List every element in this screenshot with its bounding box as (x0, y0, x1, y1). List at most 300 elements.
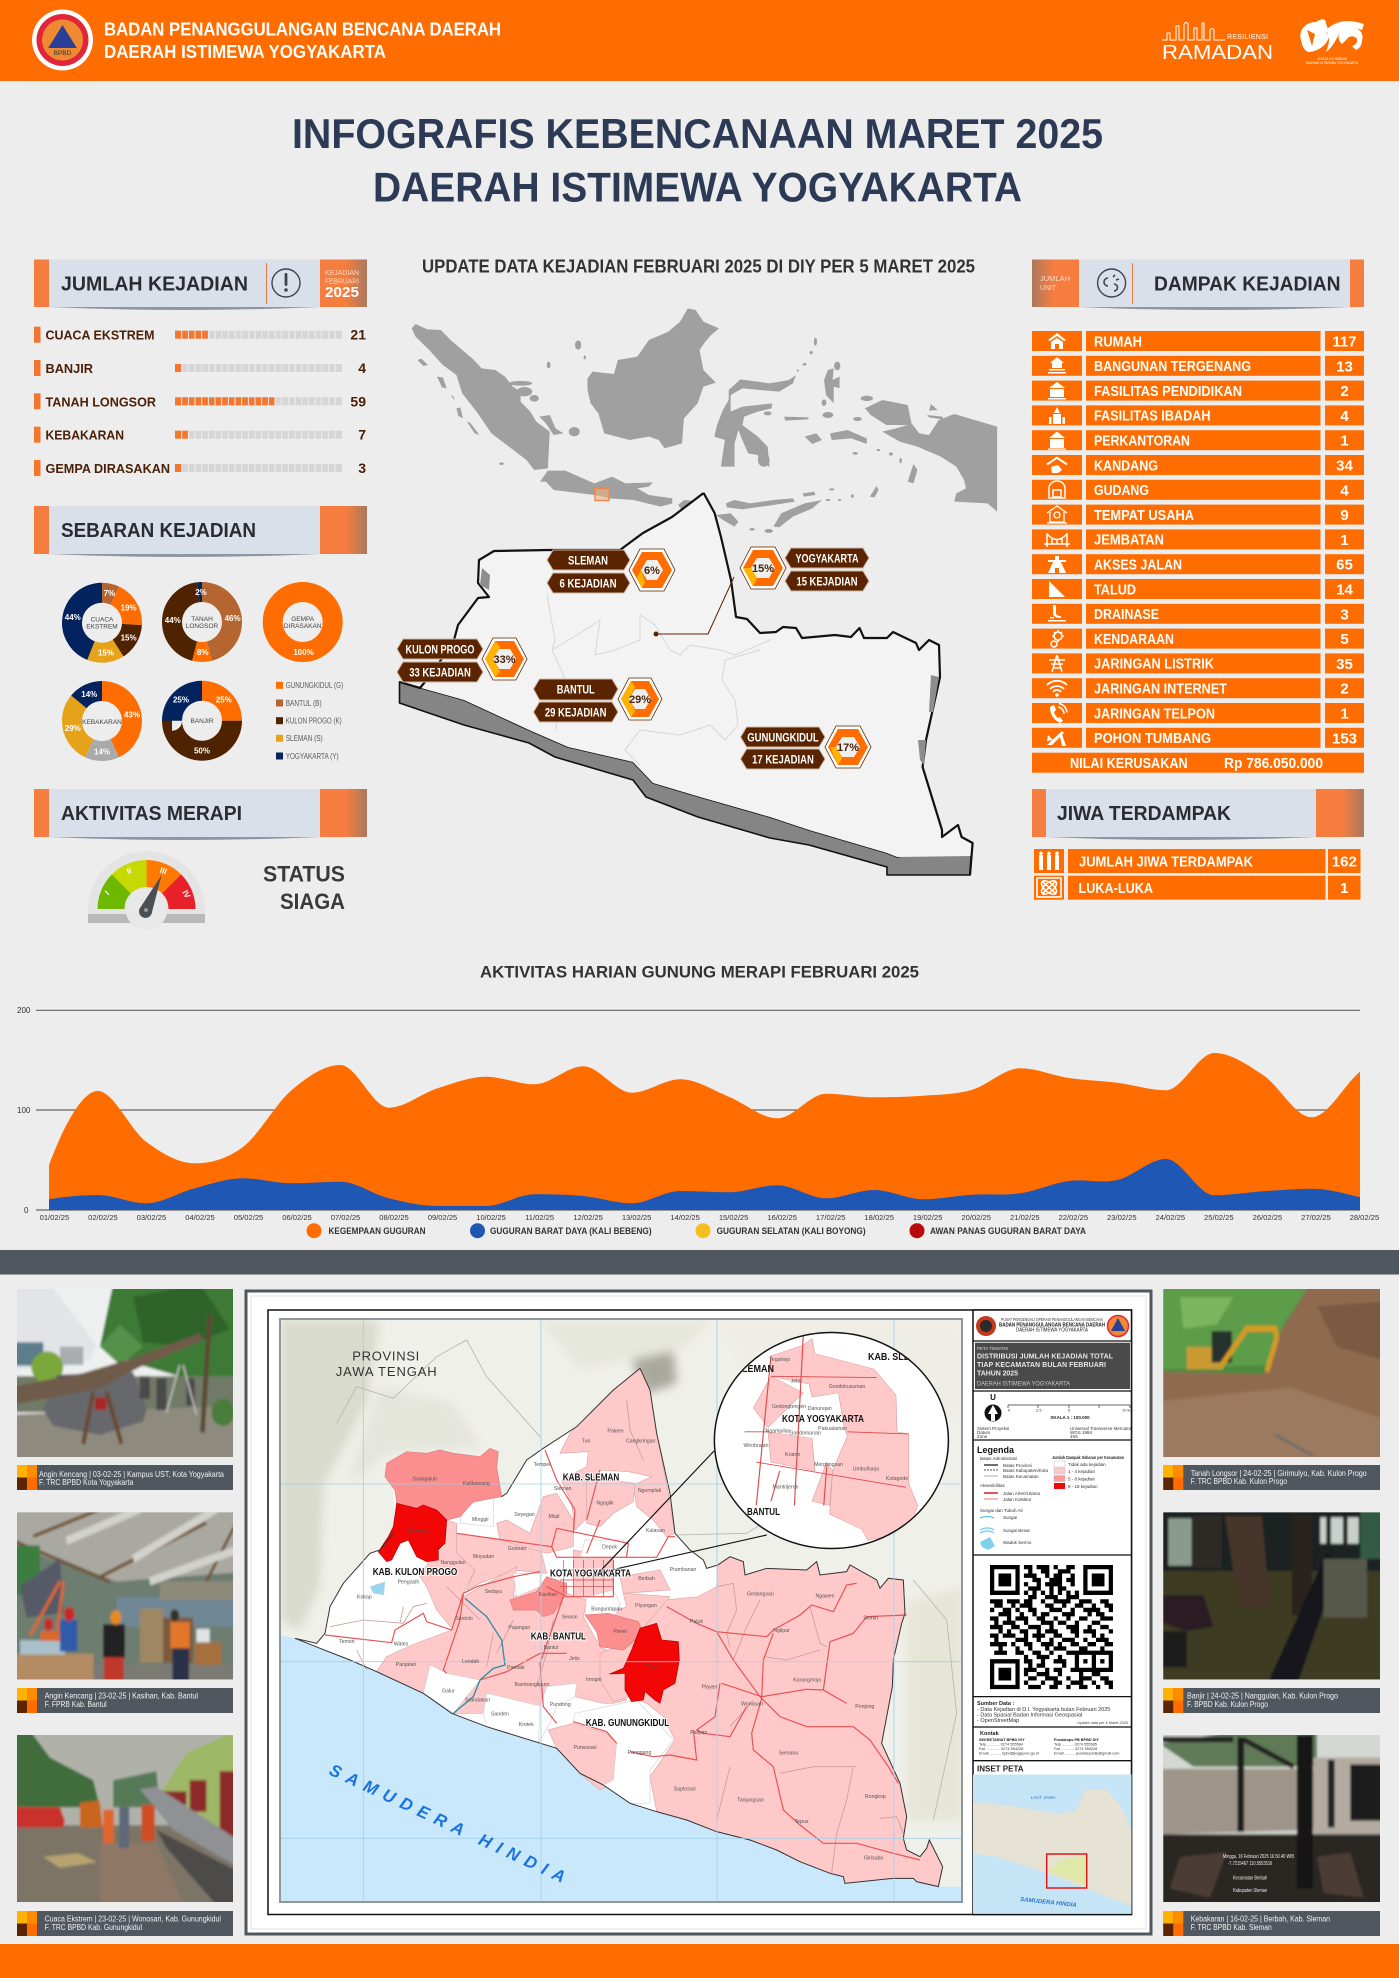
donut: cuaca ekstrem: 44% (65, 613, 81, 622)
bar row: tanah longsor (34, 393, 366, 409)
map labels: kecamatan: Depok (602, 1545, 618, 1551)
sidebar legend: Tidak ada kejadian (1068, 1462, 1106, 1467)
x axis date labels: 24/02/25 (1156, 1213, 1185, 1222)
sidebar map title: DAERAH ISTIMEWA YOGYAKARTA (977, 1380, 1071, 1388)
divider band (0, 1250, 1399, 1274)
sidebar map title (975, 1343, 1130, 1389)
map labels: kecamatan: Saptosari (674, 1786, 696, 1792)
caption: photo kampus UST: F. TRC BPBD Kota Yogyakarta (39, 1478, 134, 1487)
panel heading: dampak kejadian: DAMPAK KEJADIAN (1154, 272, 1340, 296)
title (292, 110, 1103, 210)
title: DAERAH ISTIMEWA YOGYAKARTA (373, 164, 1022, 210)
table row: jembatan: JEMBATAN (1094, 533, 1164, 549)
bar row: gempa dirasakan: GEMPA DIRASAKAN (46, 461, 170, 476)
table row: gudang: 4 (1340, 482, 1349, 499)
contact: Kontak (980, 1731, 1000, 1737)
map labels: kecamatan: Semin (863, 1615, 878, 1621)
x axis date labels: 21/02/25 (1010, 1213, 1040, 1222)
photo: kebakaran berbah: Kecamatan Berbah (1233, 1875, 1268, 1882)
icon: Resiliensi Ramadan logo: RESILIENSI (1227, 34, 1268, 41)
photo: kebakaran berbah: -7.7215467 110.5553516 (1228, 1860, 1273, 1867)
data source note: Sumber Data : (977, 1701, 1014, 1707)
map labels: kecamatan: Ngawen (815, 1594, 835, 1600)
map labels: kabupaten and province (336, 1349, 669, 1729)
panel heading: dampak kejadian: JUMLAH (1040, 274, 1070, 283)
contact: Pusdalops-PB BPBD DIY (1054, 1738, 1099, 1742)
sidebar legend: Waduk Sermo (1003, 1540, 1032, 1545)
callout: gunungkidul: GUNUNGKIDUL (747, 732, 819, 744)
map labels: kecamatan: Rongkop (865, 1794, 886, 1800)
sidebar legend: Jalan Arteri/Utama (1003, 1491, 1041, 1496)
photo: kebakaran berbah: Kabupaten Sleman (1233, 1888, 1267, 1894)
y axis labels and gridlines: 100 (17, 1106, 31, 1115)
contact: Email ........... bpbd@jogjaprov.go.id (979, 1752, 1039, 1756)
bar row: banjir: 4 (358, 360, 366, 376)
QR code (990, 1565, 1113, 1689)
panel heading: aktivitas merapi: AKTIVITAS MERAPI (61, 802, 242, 825)
callout: bantul (534, 678, 662, 722)
donut: gempa dirasakan (273, 592, 333, 657)
x axis date labels: 20/02/25 (961, 1213, 991, 1222)
icon: Resiliensi Ramadan logo (1162, 22, 1273, 64)
inset labels: Umbulharjo (853, 1467, 879, 1473)
table row: nilai kerusakan: NILAI KERUSAKAN (1070, 756, 1188, 772)
x axis date labels: 05/02/25 (234, 1213, 263, 1222)
map labels: kecamatan: Girisubo (864, 1856, 883, 1862)
sidebar legend: Batas Provinsi (1003, 1463, 1032, 1468)
table row: jaringan internet: JARINGAN INTERNET (1094, 682, 1227, 698)
callout: sleman: SLEMAN (568, 556, 608, 568)
data source note: - OpenStreetMap (977, 1718, 1019, 1724)
donut: kebakaran: KEBAKARAN (82, 719, 122, 726)
table row: pohon tumbang: 153 (1332, 730, 1357, 747)
inset labels: Pakualaman (818, 1426, 847, 1432)
map labels: kecamatan: Nanggulan (440, 1560, 466, 1566)
donut: cuaca ekstrem: 15% (121, 634, 137, 642)
table row: jumlah jiwa terdampak: JUMLAH JIWA TERDAMPAK (1079, 854, 1253, 870)
map: indonesia (412, 308, 997, 533)
map labels: kecamatan: Sewon (562, 1615, 578, 1621)
caption: photo kasihan: F. FPRB Kab. Bantul (45, 1700, 107, 1709)
table row: rumah (1032, 331, 1364, 351)
table row: jaringan internet: 2 (1340, 681, 1349, 698)
map labels: kecamatan: Sentolo (455, 1616, 473, 1622)
caption: photo nanggulan (1163, 1688, 1380, 1713)
panel heading: jumlah kejadian: KEJADIAN (325, 268, 359, 277)
table row: jaringan telpon: JARINGAN TELPON (1094, 706, 1215, 722)
chart legend: KEGEMPAAN GUGURAN (328, 1226, 426, 1237)
leader line: Yogyakarta (656, 577, 734, 634)
map labels: kecamatan: Playen (701, 1684, 717, 1690)
red kecamatan (378, 1503, 679, 1703)
table row: rumah: 117 (1332, 334, 1357, 350)
y axis labels and gridlines: 0 (24, 1206, 29, 1215)
chart legend: AWAN PANAS GUGURAN BARAT DAYA (930, 1226, 1086, 1237)
map labels: kabupaten and province: KAB. GUNUNGKIDUL (586, 1718, 669, 1729)
contact: SEKRETARIAT BPBD DIY (979, 1738, 1025, 1742)
table row: kandang: KANDANG (1094, 458, 1158, 474)
inset labels: Mantrijeron (773, 1484, 799, 1490)
photo: tanah longsor girimulyo (1163, 1289, 1380, 1457)
donut: cuaca ekstrem: 15% (98, 648, 114, 658)
caption: photo wonosari: Cuaca Ekstrem | 23-02-25 | Wonosari, Kab. Gunungkidul (45, 1915, 221, 1924)
map sidebar (973, 1310, 1134, 1914)
map labels: kecamatan: Srandakan (465, 1697, 490, 1703)
table row: jaringan listrik: JARINGAN LISTRIK (1094, 657, 1214, 673)
sidebar header with logos: DAERAH ISTIMEWA YOGYAKARTA (1016, 1328, 1089, 1334)
map labels: kecamatan: Nglipar (773, 1628, 790, 1634)
status text: SIAGA (280, 889, 345, 914)
map labels: kecamatan: Girimulyo (408, 1529, 430, 1535)
callout: kulon progo: KULON PROGO (406, 644, 475, 656)
north arrow and scale: SKALA 1 : 100.000 (1050, 1415, 1090, 1420)
contact (979, 1731, 1119, 1756)
sidebar legend: Batas Kabupaten/Kota (1003, 1468, 1049, 1473)
map labels: kecamatan: Dlingo (645, 1664, 659, 1670)
table row: kandang (1032, 455, 1364, 475)
light pink kecamatan (377, 1368, 943, 1887)
callout: gunungkidul (741, 726, 871, 769)
map labels: kecamatan: Sanden (491, 1712, 509, 1718)
table row: nilai kerusakan: Rp 786.050.000 (1224, 756, 1323, 772)
map labels: kecamatan: Kasihan (539, 1592, 557, 1598)
bar row: banjir (34, 360, 366, 376)
donut: cuaca ekstrem (65, 589, 137, 658)
panel: aktivitas merapi (34, 789, 367, 930)
callout: kulon progo: 33 KEJADIAN (409, 668, 471, 680)
gauge: status merapi: III (159, 866, 168, 876)
map labels: kecamatan: Cangkringan (626, 1438, 656, 1444)
map labels: kecamatan: Pengasih (398, 1579, 419, 1585)
table row: pohon tumbang (1032, 728, 1364, 748)
icon: warehouse (1049, 481, 1065, 498)
donut: cuaca ekstrem: 19% (121, 604, 137, 612)
chart legend (306, 1223, 1086, 1238)
photo: angin kencang kasihan (17, 1512, 233, 1680)
map labels: kecamatan: Berbah (638, 1576, 655, 1582)
panel heading: dampak kejadian: UNIT (1040, 283, 1056, 292)
callout: bantul: 29% (629, 694, 651, 706)
panel heading: sebaran kejadian (34, 506, 367, 557)
icon: mosque (1049, 407, 1065, 424)
white kecamatan (423, 1497, 673, 1803)
photo: pohon tumbang kampus UST (17, 1289, 233, 1457)
caption: photo kasihan: Angin Kencang | 23-02-25 | Kasihan, Kab. Bantul (45, 1692, 198, 1700)
table row: tempat usaha: TEMPAT USAHA (1094, 508, 1194, 524)
inset labels: KOTA YOGYAKARTA (782, 1414, 864, 1425)
x axis date labels: 28/02/25 (1350, 1213, 1379, 1222)
map labels: kecamatan: Bambanglipuro (515, 1682, 550, 1688)
inset labels: Gondokusuman (829, 1384, 865, 1390)
map labels: kecamatan: Karangmojo (793, 1677, 821, 1683)
contact: Email .......... pusdalopsdiy@gmail.com (1054, 1752, 1119, 1756)
table row: pohon tumbang: POHON TUMBANG (1094, 731, 1211, 747)
contact: Fax ............. 0274 554228 (979, 1747, 1023, 1751)
inset labels: Kraton (785, 1452, 800, 1458)
header organisation name: BADAN PENANGGULANGAN BENCANA DAERAH (104, 20, 501, 40)
north arrow and scale: 2,5 (1036, 1408, 1042, 1412)
map labels: kecamatan: Wonosari (741, 1702, 763, 1708)
chart legend: GUGURAN BARAT DAYA (KALI BEBENG) (490, 1226, 652, 1237)
status text (263, 862, 345, 914)
x axis date labels (40, 1213, 1379, 1222)
map labels: kecamatan: Pajangan (508, 1625, 530, 1631)
caption: photo girimulyo: Tanah Longsor | 24-02-25 | Girimulyo, Kab. Kulon Progo (1191, 1469, 1367, 1478)
panel heading: sebaran kejadian: SEBARAN KEJADIAN (61, 519, 256, 542)
map labels: kecamatan: Turi (582, 1438, 590, 1444)
sidebar legend: Sungai (1003, 1515, 1017, 1520)
panel heading: dampak kejadian (1032, 260, 1364, 310)
panel heading: jumlah kejadian: FEBRUARI (325, 276, 359, 286)
inset labels: Mergangsan (814, 1462, 843, 1468)
north arrow and scale: Datum (977, 1430, 991, 1435)
map labels: kecamatan: Gedangsari (747, 1592, 774, 1598)
map labels: kecamatan: Wates (394, 1641, 409, 1647)
x axis date labels: 04/02/25 (185, 1213, 215, 1222)
table row: rumah: RUMAH (1094, 334, 1142, 350)
icon: phone signal (1050, 704, 1067, 723)
sidebar map title: TIAP KECAMATAN BULAN FEBRUARI (977, 1362, 1106, 1369)
map labels: kecamatan: Pundong (550, 1702, 571, 1708)
map labels: kecamatan: Ngemplak (638, 1488, 662, 1494)
inset labels (742, 1353, 908, 1515)
legend: kabupaten: BANTUL (B) (286, 699, 322, 708)
sidebar map title: TAHUN 2025 (977, 1370, 1018, 1378)
inset labels: KAB. SLEMAN (868, 1352, 930, 1363)
icon: BPBD logo (32, 10, 93, 70)
chart legend: GUGURAN SELATAN (KALI BOYONG) (717, 1226, 866, 1237)
map labels: kecamatan: Tanjungsari (737, 1798, 764, 1804)
donut: kebakaran: 29% (65, 724, 81, 733)
north arrow and scale: Zone (977, 1434, 988, 1439)
x axis date labels: 11/02/25 (525, 1213, 554, 1222)
table row: tempat usaha (1032, 505, 1364, 525)
callout: yogyakarta: 15 KEJADIAN (796, 576, 858, 588)
icon: people (1039, 852, 1059, 870)
legend: kabupaten: SLEMAN (S) (286, 734, 323, 743)
table row: kendaraan (1032, 629, 1364, 649)
donut: tanah longsor (165, 588, 241, 657)
panel heading: jiwa terdampak: JIWA TERDAMPAK (1057, 802, 1231, 825)
caption: photo kampus UST: Angin Kencang | 03-02-25 | Kampus UST, Kota Yogyakarta (39, 1470, 224, 1479)
header organisation name (104, 20, 501, 62)
table row: nilai kerusakan (1032, 753, 1364, 773)
caption: photo berbah (1163, 1911, 1380, 1936)
north arrow and scale: 49S (1070, 1434, 1078, 1439)
caption: photo nanggulan: Banjir | 24-02-25 | Nanggulan, Kab. Kulon Progo (1187, 1692, 1338, 1700)
panel heading: jumlah kejadian (34, 260, 367, 310)
footer bar (0, 1944, 1399, 1978)
sidebar legend: Sungai Besar (1003, 1528, 1031, 1533)
table row: luka-luka: LUKA-LUKA (1078, 881, 1153, 897)
donut: kebakaran: 14% (94, 748, 110, 756)
icon: Resiliensi Ramadan logo: RAMADAN (1162, 41, 1273, 64)
sidebar legend: Jumlah Dampak Sebaran per Kecamatan (1052, 1455, 1124, 1460)
icon: house (1048, 333, 1066, 349)
table row: jaringan telpon: 1 (1340, 706, 1349, 722)
panel heading: jiwa terdampak (1032, 789, 1364, 840)
map label: samudera hindia: SAMUDERA HINDIA (326, 1760, 568, 1887)
contact: Fax ............ 0274 554228 (1054, 1747, 1097, 1751)
title: INFOGRAFIS KEBENCANAAN MARET 2025 (292, 110, 1103, 157)
x axis date labels: 09/02/25 (428, 1213, 457, 1222)
table row: kandang: 34 (1336, 458, 1353, 474)
inset labels: BANTUL (747, 1507, 780, 1518)
data source note (977, 1701, 1128, 1725)
status text: STATUS (263, 862, 345, 886)
sidebar legend: Jalan Kolektor (1003, 1497, 1032, 1502)
donut: tanah longsor: 46% (225, 614, 241, 623)
x axis date labels: 03/02/25 (137, 1213, 166, 1222)
sidebar legend: 9 - 18 kejadian (1068, 1484, 1098, 1489)
donut: tanah longsor: 44% (165, 616, 181, 625)
panel heading: jumlah kejadian: JUMLAH KEJADIAN (61, 272, 248, 296)
table row: jembatan: 1 (1340, 532, 1349, 549)
table row: bangunan tergenang: 13 (1336, 358, 1353, 375)
icon: fallen tree (1047, 731, 1066, 746)
table row: gudang (1032, 480, 1364, 500)
x axis date labels: 26/02/25 (1253, 1213, 1282, 1222)
callout: gunungkidul: 17% (837, 742, 859, 754)
donut: gempa dirasakan: GEMPA (291, 616, 315, 623)
donut: banjir (172, 691, 232, 756)
map labels: kecamatan: Jetis (569, 1656, 580, 1662)
marker: DIY location on Java (595, 488, 609, 500)
map labels: kecamatan: Pleret (613, 1629, 627, 1635)
bar row: cuaca ekstrem: CUACA EKSTREM (46, 328, 154, 342)
map labels: kecamatan: Kalasan (646, 1528, 665, 1534)
inset labels: Gedongtengen (772, 1404, 806, 1410)
table row: gudang: GUDANG (1094, 483, 1149, 499)
data source note: Update data per 5 Maret 2025 (1077, 1721, 1128, 1725)
area: kegempaan guguran (49, 1053, 1360, 1210)
north arrow and scale: 5 (1068, 1408, 1071, 1412)
city grid (560, 1560, 613, 1597)
x axis date labels: 06/02/25 (282, 1213, 312, 1222)
caption: photo kampus UST (17, 1465, 233, 1490)
x axis date labels: 18/02/25 (864, 1213, 894, 1222)
bar row: banjir: BANJIR (46, 361, 94, 376)
sidebar legend: 5 - 8 kejadian (1068, 1476, 1096, 1482)
sidebar legend: Aksesibilitas (980, 1483, 1006, 1488)
table row: akses jalan: 65 (1336, 557, 1353, 574)
photo: cuaca ekstrem wonosari (17, 1735, 233, 1902)
sidebar legend: Sungai dan Tubuh Air (980, 1508, 1024, 1513)
table row: fasilitas ibadah: 4 (1340, 408, 1349, 425)
bar row: gempa dirasakan (34, 460, 366, 476)
gauge: status merapi (88, 851, 205, 930)
caption: photo berbah: F. TRC BPBD Kab. Sleman (1191, 1923, 1272, 1932)
gauge: status merapi: I (103, 889, 111, 897)
table row: perkantoran: PERKANTORAN (1094, 434, 1190, 450)
callout: sleman: 6 KEJADIAN (560, 578, 616, 590)
contact: Telp ............ 0274 555584 (979, 1742, 1023, 1746)
gauge: status merapi: II (125, 866, 133, 876)
map: DIY province with shadow (400, 493, 973, 875)
table row: perkantoran (1032, 430, 1364, 450)
sidebar legend: Batas Administrasi (980, 1456, 1017, 1461)
header organisation name: DAERAH ISTIMEWA YOGYAKARTA (104, 42, 386, 62)
icon: bandage (1037, 878, 1061, 897)
panel: jiwa terdampak (1032, 789, 1364, 900)
table row: drainase (1032, 604, 1364, 624)
map labels: kecamatan (339, 1428, 886, 1862)
donut: tanah longsor: TANAH (191, 616, 213, 623)
map labels: kecamatan: Ngaglik (596, 1500, 614, 1506)
legend: kabupaten: KULON PROGO (K) (286, 716, 342, 726)
donut: banjir: 25% (173, 696, 189, 704)
x axis date labels: 12/02/25 (573, 1213, 603, 1222)
north arrow and scale: Sistem Proyeksi (977, 1426, 1009, 1431)
bar row: cuaca ekstrem: 21 (350, 327, 366, 343)
table row: akses jalan: AKSES JALAN (1094, 558, 1182, 574)
icon: shop (1047, 506, 1067, 523)
table row: jaringan listrik (1032, 653, 1364, 673)
contact: Telp ........... 0274 555585 (1054, 1742, 1097, 1746)
donut: kebakaran: 14% (81, 690, 97, 699)
sidebar legend (977, 1445, 1124, 1550)
sidebar map title: PETA TEMATIK (977, 1346, 1009, 1351)
sidebar header with logos (976, 1316, 1128, 1336)
sidebar legend: 1 - 4 kejadian (1068, 1469, 1096, 1474)
donut: banjir: 50% (194, 746, 210, 756)
map labels: kecamatan: Kalibawang (463, 1481, 490, 1487)
table row: talud: TALUD (1094, 582, 1136, 598)
river (453, 1598, 505, 1713)
panel: dampak kejadian (1032, 260, 1364, 773)
map labels: kabupaten and province: KAB. SLEMAN (563, 1473, 619, 1484)
table row: bangunan tergenang: BANGUNAN TERGENANG (1094, 359, 1251, 375)
y axis labels and gridlines (17, 1006, 1360, 1215)
sidebar legend: Legenda (977, 1445, 1015, 1455)
callout: kulon progo: 33% (493, 654, 516, 666)
caption: photo wonosari (17, 1911, 233, 1936)
province base (295, 1368, 943, 1887)
north arrow and scale: 10 km (1122, 1408, 1134, 1412)
donut: banjir: 25% (216, 696, 232, 704)
map labels: kecamatan: Patuk (690, 1619, 704, 1625)
x axis date labels: 27/02/25 (1301, 1213, 1331, 1222)
y axis labels and gridlines: 200 (17, 1006, 31, 1015)
north arrow and scale: U (990, 1393, 996, 1402)
caption: photo kasihan (17, 1688, 233, 1713)
sidebar header with logos: BADAN PENANGGULANGAN BENCANA DAERAH (999, 1322, 1105, 1328)
map labels: kecamatan: Minggir (472, 1517, 489, 1523)
table row: perkantoran: 1 (1340, 433, 1349, 450)
table row: jaringan internet (1032, 678, 1364, 698)
callout: sleman (547, 549, 675, 593)
icon: cattle shed (1046, 456, 1068, 473)
panel heading: aktivitas merapi (34, 789, 367, 840)
map labels: kecamatan: Temon (339, 1639, 355, 1645)
map labels: kecamatan: Lendah (462, 1659, 479, 1665)
map labels: kecamatan: Seyegan (514, 1512, 535, 1518)
x axis date labels: 22/02/25 (1059, 1213, 1088, 1222)
caption: photo nanggulan: F. BPBD Kab. Kulon Progo (1187, 1700, 1268, 1709)
photo: kebakaran berbah (1163, 1735, 1380, 1902)
bar row: kebakaran (34, 427, 366, 443)
x axis date labels: 14/02/25 (670, 1213, 700, 1222)
map labels: kecamatan: Piyungan (635, 1603, 657, 1609)
map labels: kecamatan: Pakem (607, 1428, 624, 1434)
area: guguran barat daya (49, 1159, 1360, 1210)
sidebar map title: DISTRIBUSI JUMLAH KEJADIAN TOTAL (977, 1354, 1114, 1360)
callout: gunungkidul: 17 KEJADIAN (752, 754, 814, 766)
map labels: kecamatan: Pandak (507, 1665, 525, 1671)
map labels: kecamatan: Moyudan (473, 1554, 494, 1560)
medium pink kecamatan (385, 1448, 643, 1650)
legend: kabupaten (276, 681, 343, 761)
